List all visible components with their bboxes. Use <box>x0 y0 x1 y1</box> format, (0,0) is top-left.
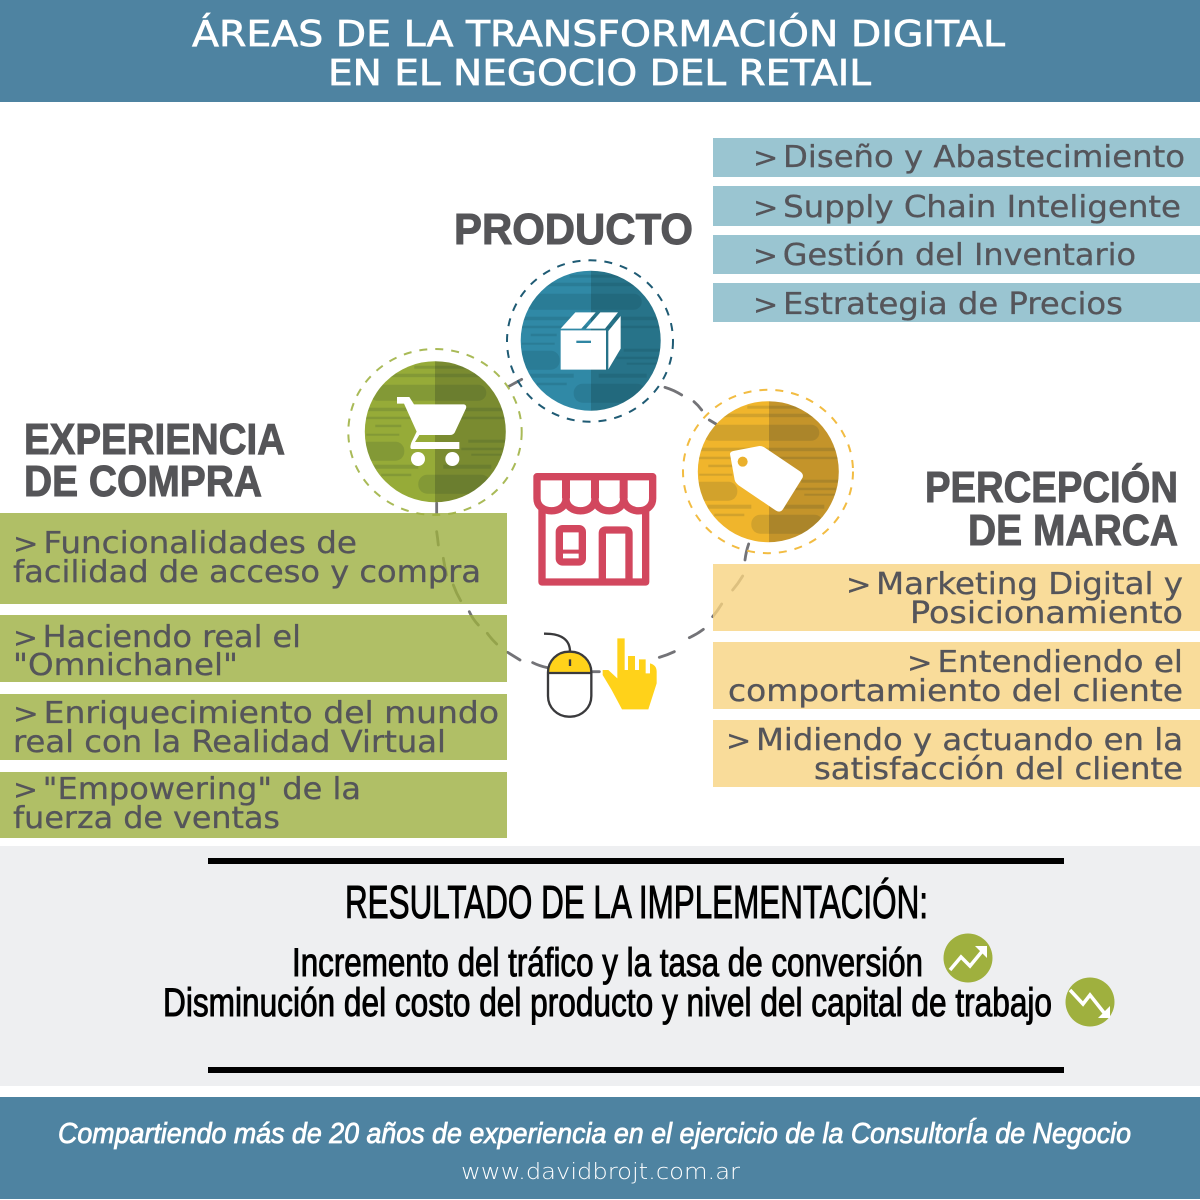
panel: percepcion de marca items <box>713 564 1200 787</box>
header band <box>0 0 1200 102</box>
panel: percepcion de marca items: > Midiendo y actuando en la <box>726 723 1183 758</box>
heading: experiencia de compra: EXPERIENCIA <box>24 415 285 464</box>
icon: store <box>537 477 653 582</box>
panel: percepcion de marca items: satisfacción del cliente <box>814 752 1183 787</box>
footer tagline: Compartiendo más de 20 años de experiencia en el ejercicio de la ConsultorÍa de Negocio <box>58 1117 1131 1150</box>
yellow circle: percepcion de marca <box>683 390 853 553</box>
heading: percepcion de marca <box>925 462 1178 555</box>
icon: mouse <box>544 634 591 717</box>
panel: percepcion de marca items: > Marketing Digital y <box>846 567 1183 602</box>
panel: experiencia de compra items: > Funcionalidades de <box>13 526 357 561</box>
panel: percepcion de marca items: > Entendiendo el <box>907 645 1183 680</box>
blue circle: producto <box>507 260 673 422</box>
icon: trend down <box>1066 978 1114 1026</box>
panel: experiencia de compra items: > Haciendo real el <box>13 620 301 655</box>
heading: experiencia de compra: DE COMPRA <box>24 457 262 506</box>
panel: resultado de la implementacion <box>0 846 1200 1086</box>
heading: experiencia de compra <box>24 415 285 506</box>
icon: pointing hand <box>603 638 657 709</box>
footer band <box>0 1097 1200 1199</box>
footer url: www.davidbrojt.com.ar <box>461 1160 741 1185</box>
text: incremento: Incremento del tráfico y la tasa de conversión <box>292 941 923 985</box>
icon: trend up <box>944 934 992 982</box>
panel: experiencia de compra items: "Omnichanel" <box>13 648 238 683</box>
panel: experiencia de compra items <box>0 513 507 838</box>
icon: price tag <box>730 446 803 512</box>
panel: experiencia de compra items: facilidad de acceso y compra <box>13 555 481 590</box>
panel: producto items <box>713 138 1200 322</box>
panel: producto items: > Diseño y Abastecimiento <box>753 140 1185 175</box>
panel: experiencia de compra items: real con la Realidad Virtual <box>13 725 446 760</box>
panel: producto items: > Estrategia de Precios <box>753 287 1123 322</box>
panel: percepcion de marca items: comportamiento del cliente <box>728 674 1183 709</box>
panel: producto items: > Supply Chain Inteligente <box>753 190 1181 225</box>
panel: experiencia de compra items: > "Empowering" de la <box>13 772 361 807</box>
panel: producto items: > Gestión del Inventario <box>753 238 1136 273</box>
heading: resultado: RESULTADO DE LA IMPLEMENTACIÓN: <box>345 876 928 928</box>
panel: experiencia de compra items: fuerza de ventas <box>13 801 280 836</box>
panel: experiencia de compra items: > Enriquecimiento del mundo <box>13 696 499 731</box>
title: ÁREAS DE LA TRANSFORMACIÓN DIGITAL <box>192 13 1005 55</box>
icon: box <box>561 312 621 370</box>
title: EN EL NEGOCIO DEL RETAIL <box>328 53 871 94</box>
icon: shopping cart <box>397 397 466 466</box>
panel: percepcion de marca items: Posicionamiento <box>910 596 1183 631</box>
heading: percepcion de marca: DE MARCA <box>968 506 1178 555</box>
heading: producto: PRODUCTO <box>454 205 693 254</box>
green circle: experiencia de compra <box>348 349 522 515</box>
title <box>192 13 1005 94</box>
dashed connector ring <box>437 379 749 672</box>
